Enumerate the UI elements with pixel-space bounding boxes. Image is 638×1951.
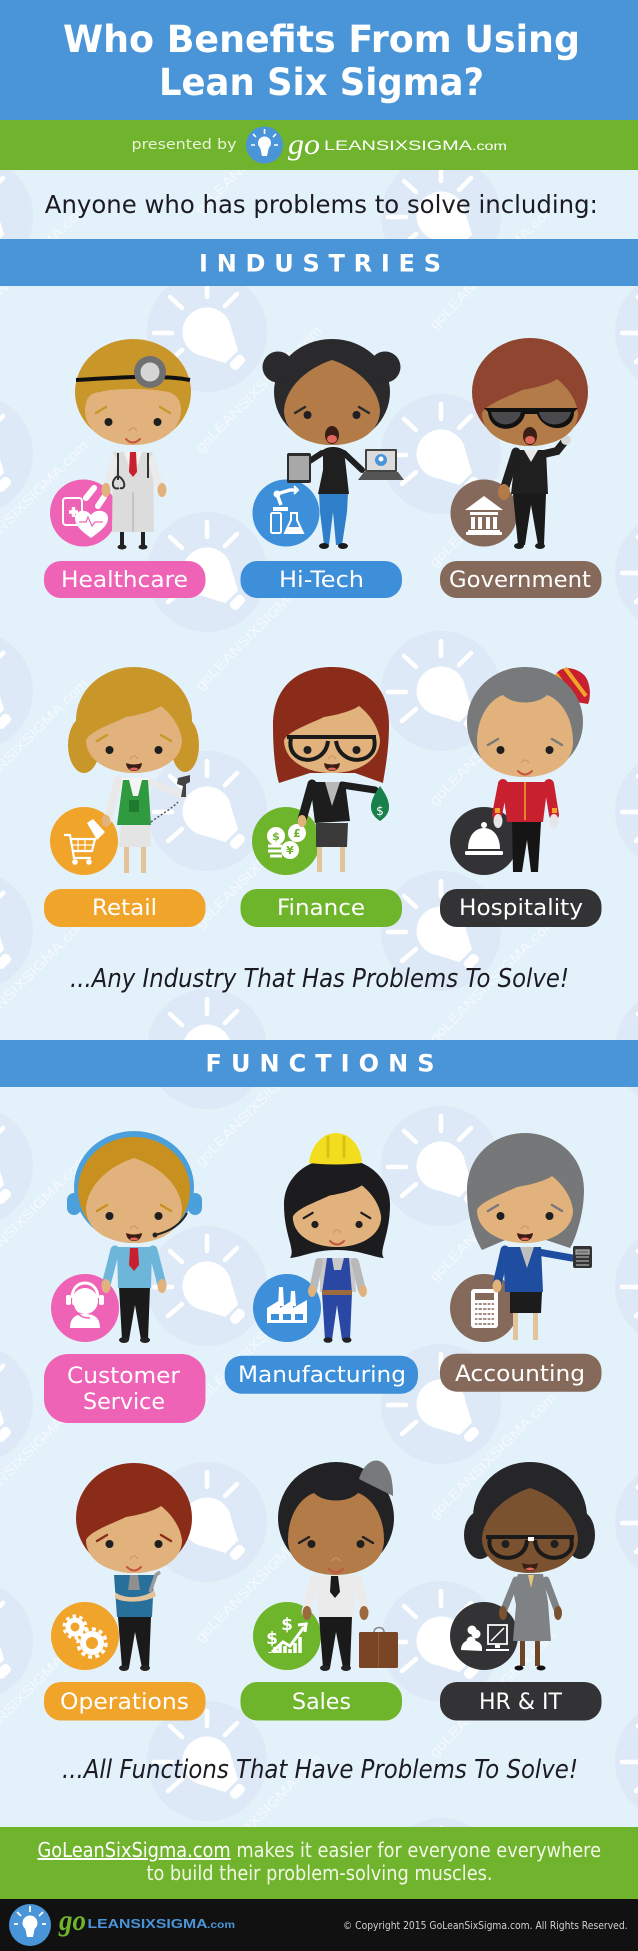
background watermark pattern: goLEANSIXSIGMA.com [426, 1627, 559, 1760]
background watermark pattern: goLEANSIXSIGMA.com [192, 84, 325, 217]
label: finance [240, 889, 402, 927]
character: salesman with briefcase [278, 1460, 398, 1671]
green footer message: GoLeanSixSigma.com makes it easier for everyone everywhere [38, 1838, 601, 1862]
panel: healthcare [44, 339, 206, 598]
black footer bar: LEANSIXSIGMA [88, 1916, 208, 1931]
background watermark pattern: goLEANSIXSIGMA.com [192, 1750, 325, 1883]
background watermark pattern: goLEANSIXSIGMA.com [426, 675, 559, 808]
character: factory worker [284, 1133, 390, 1343]
icon: retail badge [50, 807, 118, 875]
icon: sales badge: $ [266, 1629, 278, 1649]
panel: customer service [44, 1131, 206, 1423]
intro heading: Anyone who has problems to solve including: [45, 190, 598, 219]
character: finance worker with money bag: $ [376, 804, 384, 818]
character: tech worker with tablet and laptop [262, 339, 404, 549]
icon: hr and it badge [450, 1602, 518, 1670]
icon: accounting badge [450, 1274, 518, 1342]
icon: hospitality badge [450, 807, 518, 875]
presented by bar: go [288, 128, 320, 161]
section band: functions: FUNCTIONS [206, 1050, 434, 1078]
background watermark pattern: goLEANSIXSIGMA.com [192, 322, 325, 455]
label: hr and it: HR & IT [479, 1689, 562, 1715]
character: bellhop [467, 667, 590, 872]
icon: sales badge: $ [281, 1615, 293, 1635]
panel: accounting [440, 1133, 602, 1392]
icon: finance badge: £ [293, 827, 301, 840]
title banner: Lean Six Sigma? [159, 61, 484, 104]
section band: industries [0, 239, 638, 286]
panel: finance [240, 667, 402, 927]
label: hi-tech [240, 561, 402, 598]
green footer message: to build their problem-solving muscles. [146, 1861, 492, 1885]
background watermark pattern: goLEANSIXSIGMA.com [426, 1151, 559, 1284]
character: operations worker [76, 1463, 192, 1671]
label: manufacturing [225, 1356, 418, 1394]
label: customer service: Customer [67, 1363, 181, 1389]
background watermark pattern: goLEANSIXSIGMA.com [426, 1389, 559, 1522]
panel: sales [240, 1460, 402, 1720]
character: finance worker with money bag [273, 667, 389, 872]
label: healthcare: Healthcare [61, 567, 188, 593]
label: accounting: Accounting [455, 1361, 585, 1387]
label: hospitality [440, 889, 602, 927]
character: retail worker with scanner [68, 667, 199, 873]
title banner: Who Benefits From Using [63, 18, 580, 61]
label: operations: Operations [60, 1689, 189, 1715]
label: hospitality: Hospitality [459, 895, 583, 921]
label: operations [44, 1682, 206, 1720]
icon: finance badge [252, 807, 320, 875]
label: accounting [440, 1354, 602, 1392]
label: customer service [44, 1354, 206, 1423]
label: hi-tech: Hi-Tech [279, 567, 364, 593]
section band: functions [0, 1040, 638, 1087]
icon: customer service badge [51, 1274, 119, 1342]
label: finance: Finance [277, 895, 365, 921]
icon: sales badge [253, 1602, 321, 1670]
icon: logo bulb [246, 126, 283, 164]
character: doctor [75, 339, 191, 550]
background watermark pattern: goLEANSIXSIGMA.com [426, 199, 559, 332]
panel: government [440, 338, 602, 598]
background watermark pattern: goLEANSIXSIGMA.com [192, 560, 325, 693]
background watermark pattern: goLEANSIXSIGMA.com [426, 913, 559, 1046]
background watermark pattern: goLEANSIXSIGMA.com [192, 1274, 325, 1407]
title banner [0, 0, 638, 120]
label: manufacturing: Manufacturing [238, 1362, 406, 1388]
section band: industries: INDUSTRIES [199, 250, 441, 278]
label: government [440, 561, 602, 598]
panel: hi-tech [240, 339, 404, 598]
background watermark pattern: goLEANSIXSIGMA.com [192, 1512, 325, 1645]
closing line: functions: ...All Functions That Have Problems To Solve! [62, 1755, 578, 1785]
background watermark pattern: goLEANSIXSIGMA.com [192, 798, 325, 931]
presented by bar: .com [472, 141, 507, 153]
black footer bar [0, 1899, 638, 1951]
character: call center agent [67, 1131, 202, 1343]
panel: operations [44, 1463, 206, 1720]
label: sales: Sales [292, 1689, 351, 1715]
background watermark pattern: goLEANSIXSIGMA.com [192, 1036, 325, 1169]
icon: healthcare badge [50, 480, 117, 546]
label: sales [240, 1682, 402, 1720]
icon: operations badge [51, 1602, 119, 1670]
label: healthcare [44, 561, 206, 598]
panel: manufacturing [225, 1133, 418, 1394]
panel: retail [44, 667, 206, 927]
background watermark pattern: goLEANSIXSIGMA.com [426, 437, 559, 570]
closing line: industries: ...Any Industry That Has Problems To Solve! [70, 964, 569, 994]
presented by bar: presented by [132, 137, 236, 153]
label: retail: Retail [92, 895, 157, 921]
black footer bar: .com [207, 1919, 235, 1931]
panel: hospitality [440, 667, 602, 927]
black footer bar: go [58, 1904, 86, 1937]
character: hr manager [464, 1462, 595, 1670]
label: hr and it [440, 1682, 602, 1720]
icon: finance badge: $ [272, 830, 280, 843]
label: government: Government [449, 567, 591, 593]
label: retail [44, 889, 206, 927]
icon: hi-tech badge [252, 480, 320, 546]
icon: finance badge: ¥ [286, 844, 294, 857]
icon: manufacturing badge [253, 1274, 321, 1342]
panel: hr and it [440, 1462, 602, 1720]
green footer message [0, 1827, 638, 1899]
icon: footer logo bulb [9, 1904, 51, 1946]
icon: government badge [450, 480, 518, 546]
label: customer service: Service [83, 1389, 165, 1415]
presented by bar: LEANSIXSIGMA [324, 137, 473, 153]
character: agent in sunglasses [472, 338, 588, 549]
character: accountant with calculator [467, 1133, 592, 1340]
presented by bar [0, 120, 638, 170]
